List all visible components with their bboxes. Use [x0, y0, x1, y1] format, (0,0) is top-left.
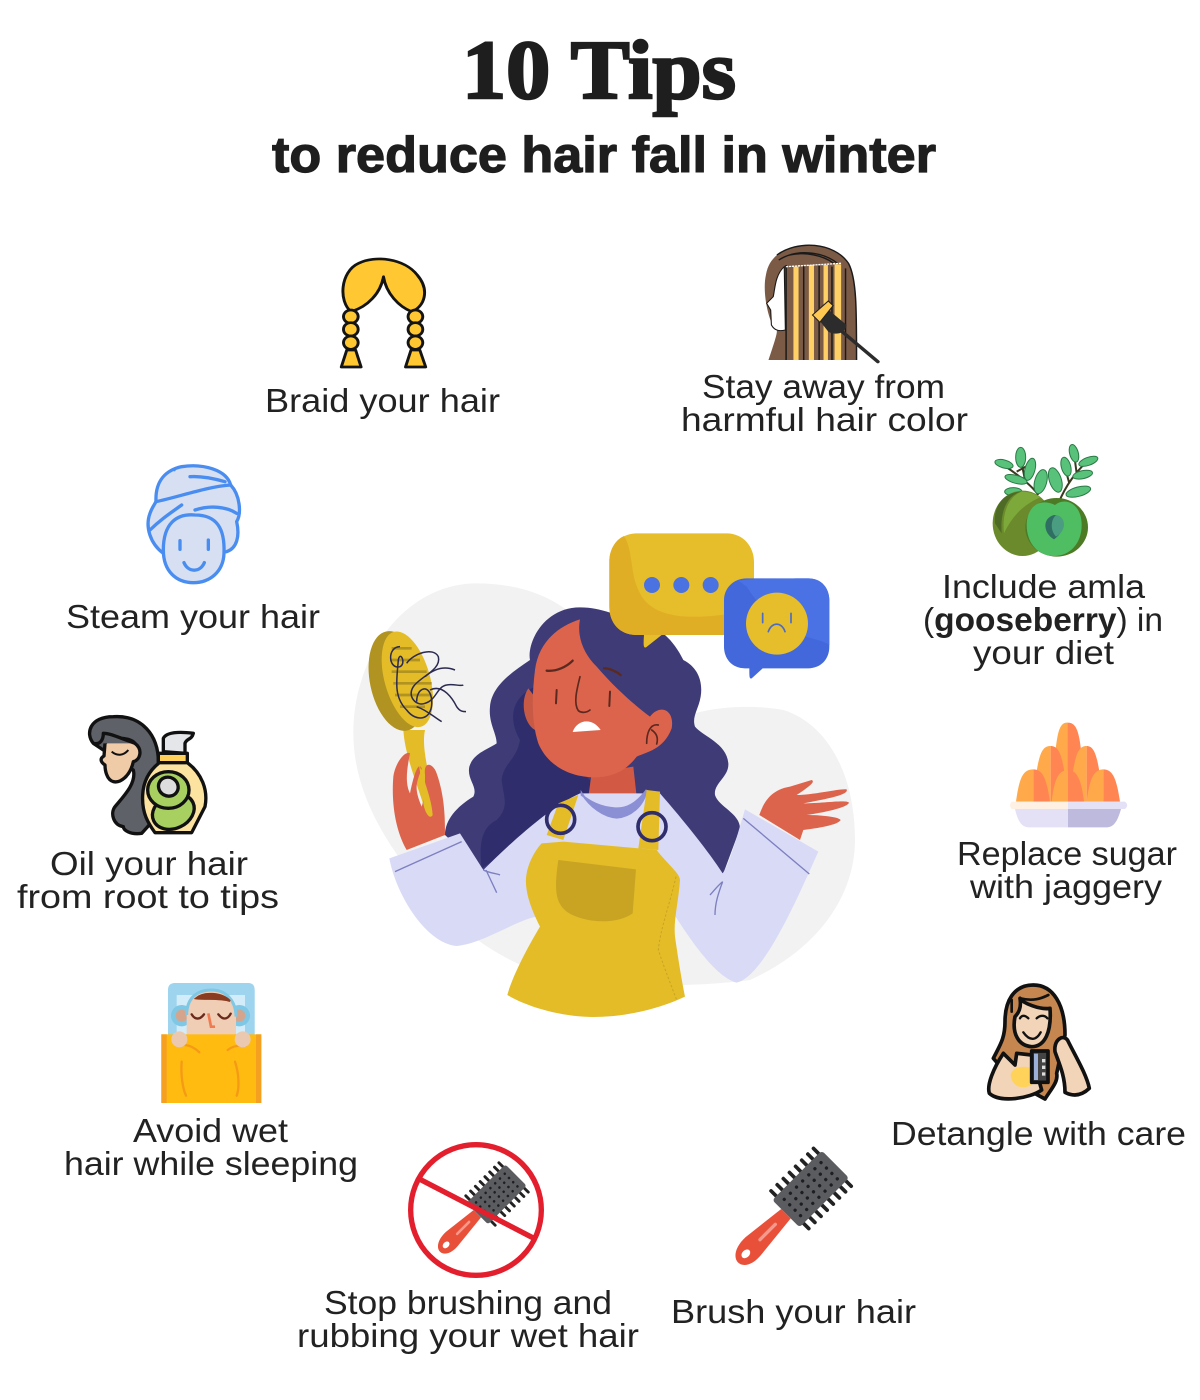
label: Replace sugar [957, 835, 1177, 872]
icon: towel wrapped head [148, 466, 239, 583]
subtitle: to reduce hair fall in winter [272, 127, 936, 183]
facial features [547, 661, 658, 744]
tip 10: steam your hair [66, 466, 320, 635]
title: 10 Tips [462, 24, 736, 117]
brush bristle rows [390, 648, 432, 707]
icon: woman combing hair [989, 985, 1089, 1099]
label [957, 835, 1177, 905]
label: Brush your hair [671, 1293, 916, 1330]
apron pocket [556, 860, 636, 921]
label: Include amla [942, 568, 1146, 605]
shirt [389, 793, 818, 983]
label: rubbing your wet hair [297, 1317, 639, 1354]
icon: jaggery pile [1010, 723, 1127, 827]
collar [582, 790, 647, 818]
yellow speech bubble [609, 533, 754, 648]
label: (gooseberry) in [923, 601, 1163, 638]
label: Stay away from [702, 368, 945, 405]
label [681, 368, 968, 438]
tip 8: wet hair sleeping [64, 983, 358, 1182]
bubble dots [644, 577, 719, 593]
label: Steam your hair [66, 598, 320, 635]
right hand [759, 780, 849, 840]
left hand [393, 753, 445, 850]
label [923, 568, 1163, 671]
label: hair while sleeping [64, 1145, 358, 1182]
icon: gooseberry [993, 444, 1099, 557]
blue speech bubble [724, 578, 829, 679]
icon: brush [719, 1145, 854, 1281]
hair [445, 607, 740, 873]
label: with jaggery [969, 868, 1163, 905]
tip 5: detangle [891, 985, 1186, 1152]
label: Detangle with care [891, 1115, 1186, 1152]
label: Avoid wet [133, 1112, 288, 1149]
label: Oil your hair [50, 845, 248, 882]
fallen hair strands [391, 647, 466, 722]
tip 7: stop brushing [297, 1145, 639, 1354]
label: Braid your hair [265, 382, 500, 419]
brush head [360, 626, 433, 736]
sleeve lines [395, 818, 809, 915]
tip 6: brush your hair [671, 1145, 916, 1330]
sad face [746, 593, 808, 655]
tip 2: hair color [681, 245, 968, 438]
tip 4: jaggery [957, 723, 1177, 905]
icon: crossed brush [411, 1145, 541, 1275]
apron [547, 790, 660, 850]
label: harmful hair color [681, 401, 968, 438]
tip 9: oil your hair [17, 717, 279, 915]
tip 1: braid your hair [265, 259, 500, 419]
hair shadow [481, 687, 590, 868]
mouth [573, 721, 601, 732]
apron rings [547, 805, 575, 833]
apron stitches [658, 877, 677, 1000]
label [17, 845, 279, 915]
icon: braids [341, 259, 426, 367]
label [64, 1112, 358, 1182]
icon: sleeping person [161, 983, 261, 1103]
face and neck [588, 767, 637, 807]
label: Stop brushing and [324, 1284, 612, 1321]
brush handle [403, 730, 433, 817]
label: from root to tips [17, 878, 279, 915]
tip 3: amla [923, 444, 1163, 671]
icon: woman with oil bottle [90, 717, 206, 836]
label: your diet [973, 634, 1114, 671]
icon: hair dye brush [765, 245, 878, 362]
central illustration: worried woman with hair brush [353, 533, 855, 1017]
label [297, 1284, 639, 1354]
background blob [353, 583, 855, 986]
